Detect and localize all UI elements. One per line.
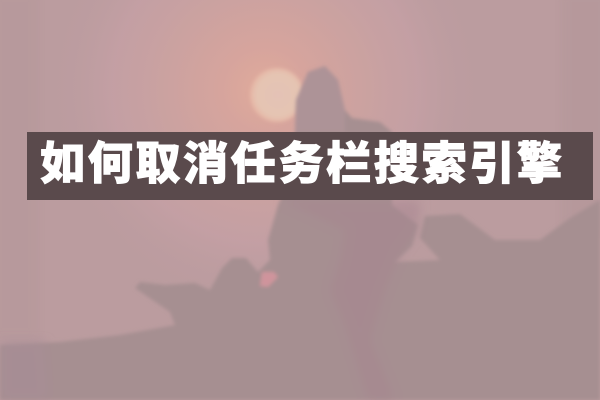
title banner bbox=[27, 132, 593, 200]
title text: 如何取消任务栏搜索引擎 bbox=[40, 138, 565, 189]
icon: sun bbox=[250, 68, 304, 122]
